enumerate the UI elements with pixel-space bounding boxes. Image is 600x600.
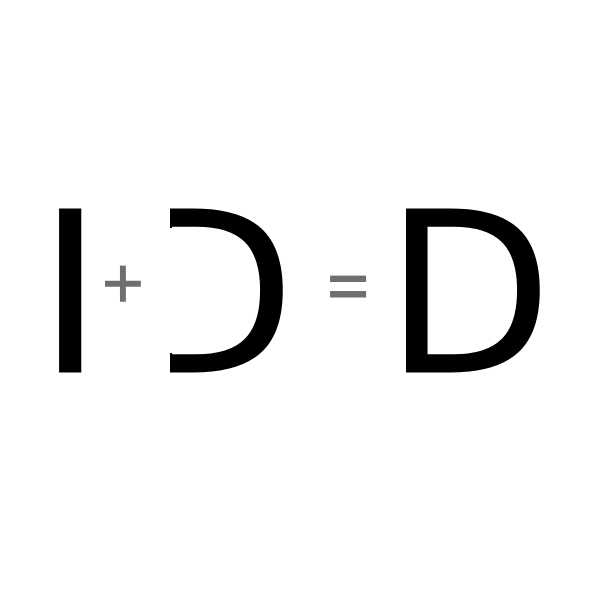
equals sign: =: [324, 240, 372, 331]
letter D: D: [385, 164, 553, 426]
plus sign: +: [100, 250, 146, 314]
letter D without its stem: D: [128, 164, 296, 426]
letter I: I: [37, 164, 103, 426]
